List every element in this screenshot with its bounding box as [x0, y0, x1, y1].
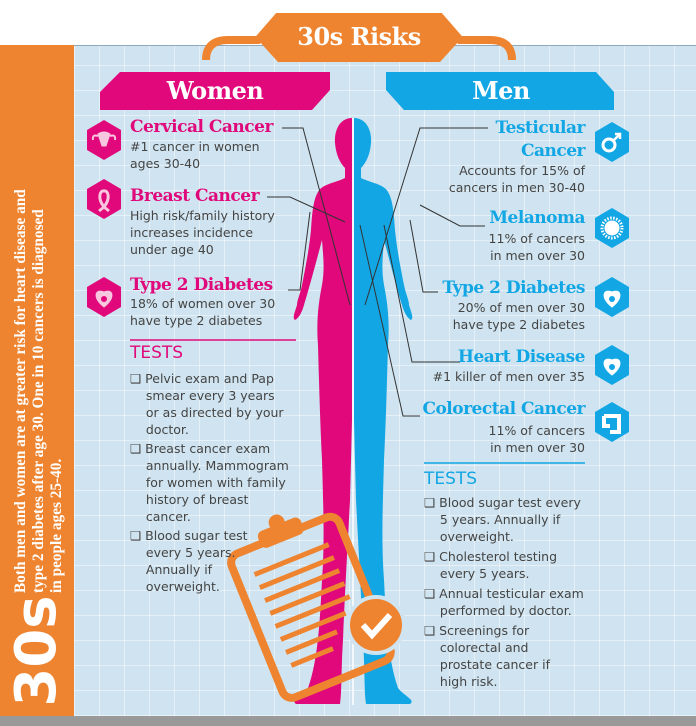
leader lines — [267, 128, 488, 416]
text: have type 2 diabetes — [130, 313, 262, 328]
sidebar big label: 30s — [4, 595, 69, 707]
men tests list: ❑ Annual testicular exam — [424, 586, 584, 601]
sidebar — [0, 45, 74, 716]
separators — [130, 339, 296, 341]
text: under age 40 — [130, 242, 214, 257]
text: Colorectal Cancer — [422, 399, 585, 419]
text: 18% of women over 30 — [130, 296, 275, 311]
text: cancers in men 30-40 — [449, 180, 585, 195]
women tests list: annually. Mammogram — [146, 458, 289, 473]
text: Cervical Cancer — [130, 117, 273, 137]
sidebar text: Both men and women are at greater risk for heart disease and — [12, 189, 29, 593]
men tests heading: TESTS — [424, 469, 477, 489]
text: Melanoma — [489, 208, 585, 228]
text: Heart Disease — [458, 347, 585, 367]
icon details women — [93, 132, 115, 307]
women tests list: or as directed by your — [146, 405, 284, 420]
men risk: colorectal — [422, 399, 586, 455]
text: Testicular — [495, 118, 585, 138]
text: Cancer — [521, 141, 585, 161]
women tests list: ❑ Breast cancer exam — [130, 441, 270, 456]
sidebar text — [12, 189, 65, 593]
text: ages 30-40 — [130, 156, 200, 171]
men risk: diabetes — [442, 278, 585, 332]
text: High risk/family history — [130, 208, 275, 223]
women tests list: Annually if — [146, 562, 212, 577]
men tests list: ❑ Cholesterol testing — [424, 549, 557, 564]
text: Accounts for 15% of — [459, 163, 585, 178]
text: #1 cancer in women — [130, 139, 260, 154]
men tests list: ❑ Blood sugar test every — [424, 495, 581, 510]
men banner — [386, 72, 614, 110]
women tests heading: TESTS — [130, 343, 183, 363]
men heading: Men — [472, 76, 530, 105]
check circle — [348, 597, 404, 653]
women tests list: for women with family — [146, 475, 286, 490]
text: in men over 30 — [490, 248, 585, 263]
men tests list: overweight. — [440, 529, 514, 544]
text: increases incidence — [130, 225, 253, 240]
men risk: testicular — [449, 118, 586, 195]
women tests list: smear every 3 years — [146, 388, 275, 403]
text: Breast Cancer — [130, 186, 259, 206]
women tests list: every 5 years. — [146, 545, 235, 560]
men tests list: colorectal and — [440, 640, 528, 655]
body silhouette — [294, 118, 412, 705]
men tests list — [424, 495, 584, 689]
women risk: cervical — [130, 117, 274, 171]
women banner — [100, 72, 330, 110]
men tests list: performed by doctor. — [440, 603, 572, 618]
men tests list: high risk. — [440, 674, 497, 689]
sidebar text: type 2 diabetes after age 30. One in 10 cancers is diagnosed — [30, 209, 47, 593]
left icons — [87, 120, 121, 317]
women heading: Women — [167, 76, 263, 105]
women tests list: ❑ Blood sugar test — [130, 528, 248, 543]
right icons — [595, 122, 629, 442]
women risk: diabetes — [130, 275, 275, 328]
men risk: heart — [433, 347, 585, 384]
men risk: melanoma — [489, 208, 586, 263]
text: 11% of cancers — [489, 231, 585, 246]
women tests list: doctor. — [146, 422, 189, 437]
text: 20% of men over 30 — [458, 300, 585, 315]
title banner — [206, 17, 512, 62]
text: Type 2 Diabetes — [442, 278, 585, 298]
text: in men over 30 — [490, 440, 585, 455]
women tests list — [130, 371, 289, 594]
text: Type 2 Diabetes — [130, 275, 273, 295]
men tests list: every 5 years. — [440, 566, 529, 581]
men tests list: 5 years. Annually if — [440, 512, 560, 527]
women tests list: overweight. — [146, 579, 220, 594]
men tests list: ❑ Screenings for — [424, 623, 529, 638]
women tests list: cancer. — [146, 509, 191, 524]
title text: 30s Risks — [297, 22, 421, 51]
women tests list: history of breast — [146, 492, 248, 507]
sidebar text: in people ages 25-40. — [48, 459, 65, 593]
text: 11% of cancers — [489, 423, 585, 438]
women risk: breast — [130, 186, 275, 257]
clipboard — [220, 493, 394, 701]
text: #1 killer of men over 35 — [433, 369, 585, 384]
women tests list: ❑ Pelvic exam and Pap — [130, 371, 274, 386]
men tests list: prostate cancer if — [440, 657, 550, 672]
text: have type 2 diabetes — [453, 317, 585, 332]
